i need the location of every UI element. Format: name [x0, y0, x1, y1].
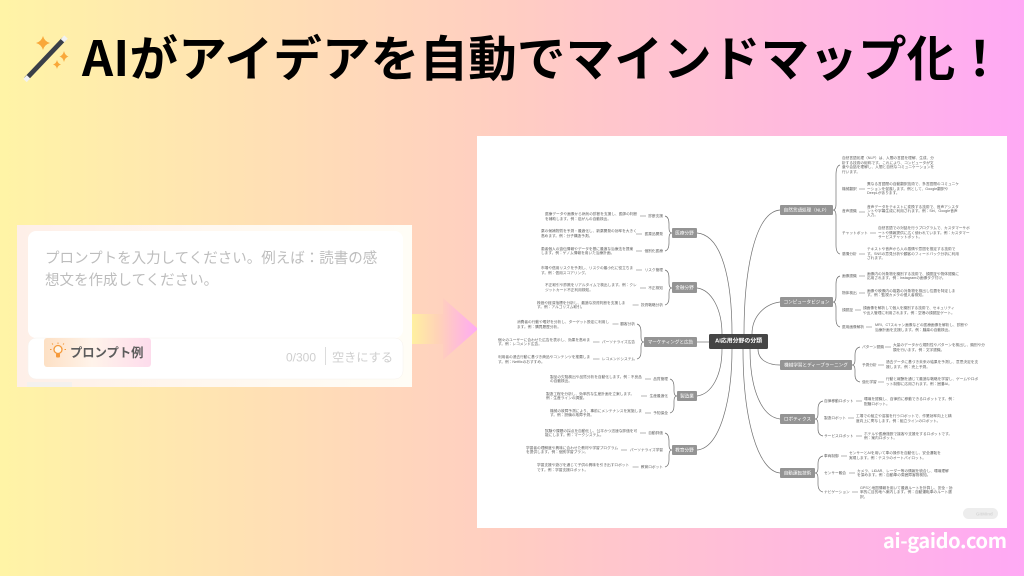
button: prompt examples: プロンプト例 — [70, 343, 143, 361]
branch: robotics: ホテルや医療施設で接客や支援をするロボットです。 — [864, 431, 952, 436]
branch: natural language processing: 異なる言語間の自動翻訳技術で、多言語間のコミュニケ — [867, 181, 959, 186]
branch: machine learning and deep learning: 行動と報酬を通じて最適な戦略を学習し、ゲームやロボ — [886, 376, 978, 381]
branch: marketing: ます。例：購買履歴分析。 — [517, 324, 561, 329]
title: AIがアイデアを自動でマインドマップ化！ — [81, 20, 1004, 90]
branch: medical: 医療データや画像から病気の診断を支援し、医師の判断 — [545, 211, 637, 216]
branch: autonomous driving: ナビゲーション — [824, 489, 850, 494]
branch: computer vision: コンピュータビジョン — [784, 298, 830, 306]
branch: manufacturing: の自動検出。 — [550, 378, 572, 383]
character counter and clear: 空きにする — [332, 350, 393, 364]
branch: computer vision: 物体検出 — [842, 290, 857, 295]
branch: education: 自動評価 — [648, 430, 663, 435]
branch: natural language processing: 感情分析 — [842, 251, 857, 256]
branch: marketing: 利用者の過去行動に基づき商品やコンテンツを推薦しま — [498, 354, 590, 359]
branch: education: 能にします。例：マークシステム。 — [545, 432, 604, 437]
branch: machine learning and deep learning: 予測分析 — [862, 362, 877, 367]
branch: finance: 不正検知 — [648, 285, 663, 290]
branch: manufacturing: 例：生産ラインの調整。 — [546, 395, 587, 400]
branch: natural language processing: テキストや音声から人の感情や意図を推定する技術で — [867, 246, 956, 251]
branch: autonomous driving: 択。 — [860, 494, 867, 499]
branch: marketing — [498, 319, 697, 364]
branch: natural language processing: 自然言語処理（NLP）は、人間の言語を理解、生成、分 — [842, 155, 934, 160]
branch: machine learning and deep learning — [780, 342, 985, 386]
branch: marketing: す。例：レコメンド広告。 — [498, 341, 542, 346]
branch: education: を提供します。例：個別学習プラン。 — [526, 449, 588, 454]
branch: robotics: ロボティクス — [784, 416, 811, 422]
branch: education: 教育分野 — [675, 446, 694, 454]
branch: finance: 株価や経済指標を分析し、最適な投資判断を支援しま — [537, 300, 626, 305]
branch: autonomous driving: 自動運転技術 — [784, 470, 812, 476]
placeholder text — [45, 250, 377, 289]
branch: manufacturing — [546, 374, 697, 417]
branch: natural language processing: す。SNSの意見分析や顧客のフィードバック分析に利用 — [867, 251, 959, 256]
central node — [709, 334, 768, 349]
branch: manufacturing: す。例：設備の故障予測。 — [550, 412, 594, 417]
branch: machine learning and deep learning: 大量のデータから規則性やパターンを検出し、識別や分 — [893, 342, 985, 347]
branch: robotics: 環境を認識し、自律的に移動できるロボットです。例： — [864, 396, 956, 401]
branch: education: です。例：学習支援ロボット。 — [537, 467, 588, 472]
branch: marketing: パーソナライズ広告 — [602, 339, 635, 344]
branch: computer vision: 治療計画を支援します。例：腫瘍の自動検出。 — [875, 327, 952, 332]
branch: robotics: 例：案内ロボット。 — [864, 435, 897, 440]
branch: education: パーソナライズ学習 — [630, 447, 663, 452]
branch: finance: 市場や信用リスクを予測し、リスクの最小化に役立ちま — [541, 265, 633, 270]
arrow — [412, 298, 478, 360]
branch: medical: します。例：ゲノム情報を用いた治療計画。 — [541, 250, 614, 255]
branch: medical: 患者個人の遺伝情報やデータを基に最適な治療法を提案 — [541, 246, 633, 251]
branch: manufacturing: 製造業 — [680, 392, 694, 400]
branch: computer vision: 顔画像を解析して個人を識別する技術で、セキュリティ — [863, 305, 955, 310]
branch: medical: 高めます。例：分子構造予測。 — [541, 233, 592, 238]
branch: natural language processing: 析する技術の総称です。これにより、コンピュータが文 — [842, 160, 934, 165]
branch: autonomous driving: 車両制御 — [824, 453, 839, 458]
branch: computer vision: 画像内の対象物を識別する技術で、顔認証や物体認識に — [867, 271, 959, 276]
branch: natural language processing: 章や会話を理解し、人間と自然なコミュニケーションを — [842, 164, 934, 169]
branch: manufacturing: 製造工程を分析し、効率的な生産計画を立案します。 — [546, 391, 634, 396]
branch: computer vision: MRI、CTスキャン画像などの医療画像を解析し、診断や — [875, 322, 968, 327]
branch: computer vision: 画像や映像内の複数の対象物を検出し位置を特定しま — [867, 288, 956, 293]
branch: manufacturing: 製品の欠陥検出や品質分析を自動化します。例：不良品 — [550, 374, 642, 379]
watermark: GitMind — [976, 512, 993, 516]
branch: robotics: 配膳ロボット。 — [864, 401, 890, 406]
branch: autonomous driving: GPSと地図情報を用いて最適ルートを計算し、安全・効 — [860, 485, 953, 490]
branch: natural language processing: ーションを促進します。例として、Google翻訳や — [867, 186, 949, 191]
branch: medical — [541, 211, 697, 255]
branch: robotics: 製造ロボット — [824, 415, 846, 420]
branch: medical: 医薬品開発 — [645, 231, 663, 236]
branch: machine learning and deep learning: パターン認識 — [862, 344, 884, 349]
branch: manufacturing: 機械の故障予測により、事前にメンテナンスを実施しま — [550, 408, 642, 413]
branch: natural language processing: されます。 — [867, 255, 885, 260]
branch: finance: リスク管理 — [645, 267, 663, 272]
branch: robotics: 度向上に寄与します。例：組立ラインのロボット。 — [856, 418, 940, 423]
branch: education: 試験や課題の採点を自動化し、公平かつ迅速な評価を可 — [545, 428, 637, 433]
branch: autonomous driving: 率的に目的地へ案内します。例：自動運転車のルート選 — [860, 489, 952, 494]
placeholder text: 想文を作成してください。 — [45, 272, 218, 289]
icon: light bulb — [50, 342, 66, 358]
prompt toolbar card — [28, 338, 403, 379]
panel: prompt input screenshot — [17, 225, 412, 387]
branch: natural language processing: ントや字幕生成に利用されます。例：Siri、Google音声 — [867, 208, 958, 213]
branch: medical: 個別化医療 — [645, 248, 663, 253]
placeholder text: プロンプトを入力してください。例えば：読書の感 — [45, 250, 377, 267]
branch: natural language processing: チャットボット — [842, 230, 868, 235]
branch: natural language processing: DeepLがあります。 — [867, 190, 900, 195]
branch: robotics — [780, 396, 956, 440]
branch: natural language processing: 機械翻訳 — [842, 186, 857, 191]
panel: mind map — [477, 136, 1007, 528]
branch: computer vision: す。例：監視カメラの侵入者検知。 — [867, 292, 926, 297]
branch: medical: を補助します。例：癌がんの自動検出。 — [545, 216, 611, 221]
branch: machine learning and deep learning: 強化学習 — [862, 379, 877, 384]
branch: education: 学習者の理解度や興味に合わせた教材や学習プログラム — [526, 445, 618, 450]
branch: natural language processing: 自然言語処理（NLP） — [784, 206, 829, 214]
branch: finance: ジットカード不正利用検知。 — [545, 287, 593, 292]
branch: marketing: す。例：Netflixのおすすめ。 — [498, 359, 545, 364]
branch: finance: す。例：アルゴリズム取引。 — [537, 304, 584, 309]
branch: marketing: 個々のユーザーに合わせた広告を表示し、効果を高めま — [498, 337, 590, 342]
branch: computer vision: 応用されます。例：Instagramの画像タグ付け。 — [867, 275, 946, 280]
branch: medical: 医療分野 — [675, 230, 694, 236]
icon: magic wand — [25, 36, 68, 80]
connectors to central node — [697, 210, 780, 473]
site domain: ai-gaido.com — [883, 525, 1007, 554]
central node: AI応用分野の分類 — [715, 336, 762, 344]
branch: natural language processing: ートや情報提供に広く使われています。例：カスタマー — [878, 230, 970, 235]
branch: robotics: 工場での組立や溶接を行うロボットで、作業効率向上と精 — [856, 413, 952, 418]
branch: machine learning and deep learning: 機械学習とディープラーニング — [784, 362, 848, 368]
branch: manufacturing: 品質管理 — [653, 376, 668, 381]
branch: machine learning and deep learning: 過去データに基づき未来の結果を予測し、意思決定を支 — [886, 359, 978, 364]
branch: finance: 投資戦略分析 — [641, 302, 663, 307]
branch: robotics: 自律移動ロボット — [824, 398, 854, 403]
branch: marketing: 顧客分析 — [620, 321, 635, 326]
branch: computer vision — [780, 271, 968, 332]
branch: natural language processing: 音声データをテキストに変換する技術で、音声アシスタ — [867, 204, 959, 209]
branch: computer vision: 画像認識 — [842, 273, 857, 278]
branch: marketing: マーケティングと広告 — [648, 338, 694, 346]
button: prompt examples — [44, 338, 151, 367]
branch: natural language processing: 音声認識 — [842, 208, 857, 213]
branch: machine learning and deep learning: ット制御に応用されます。例：囲碁AI。 — [886, 381, 952, 386]
branch: medical: 診断支援 — [648, 213, 663, 218]
branch: marketing: 消費者の行動や嗜好を分析し、ターゲット設定に利用し — [517, 319, 609, 324]
branch: education: 教育ロボット — [641, 464, 663, 469]
branch: computer vision: 医用画像解析 — [842, 324, 864, 329]
branch: computer vision: 顔認証 — [842, 307, 853, 312]
branch: education: 学習支援や遊びを通じて子供の興味を引き出すロボット — [537, 462, 629, 467]
branch: autonomous driving: センサー融合 — [824, 470, 846, 475]
branch: machine learning and deep learning: 援します。例：売上予測。 — [886, 364, 930, 369]
branch: marketing: レコメンドシステム — [602, 356, 635, 361]
branch: natural language processing: 入力。 — [867, 212, 878, 217]
branch: natural language processing: 行います。 — [842, 169, 860, 174]
watermark — [963, 508, 998, 519]
branch: robotics: サービスロボット — [824, 433, 854, 438]
branch: machine learning and deep learning: 類を行います。例：文字認識。 — [893, 347, 944, 352]
branch: autonomous driving — [780, 450, 953, 499]
branch: finance — [537, 265, 697, 309]
branch: natural language processing: サービスチャットボット。 — [878, 234, 922, 239]
branch: natural language processing — [780, 155, 970, 260]
branch: finance: す。例：信用スコアリング。 — [541, 270, 588, 275]
branch: manufacturing: 予知保全 — [653, 410, 668, 415]
branch: education — [526, 428, 697, 472]
character counter and clear — [286, 347, 393, 365]
branch: finance: 不正取引や詐欺をリアルタイムで検出します。例：クレ — [545, 282, 637, 287]
branch: autonomous driving: 実現します。例：テスラのオートパイロット。 — [849, 455, 926, 460]
branch: autonomous driving: センサーとAIを用いて車の操作を自動化し、安全運転を — [849, 450, 941, 455]
branch: manufacturing: 生産最適化 — [650, 393, 668, 398]
character counter and clear: 0/300 — [286, 350, 316, 364]
prompt text card — [28, 231, 403, 338]
branch: computer vision: や出入管理に利用されます。例：空港の顔認証ゲート。 — [863, 310, 955, 315]
branch: medical: 薬の候補物質を予測・最適化し、新薬開発の効率を大きく — [541, 228, 637, 233]
branch: natural language processing: 自然言語での対話を行うプログラムで、カスタマーサポ — [878, 225, 970, 230]
branch: autonomous driving: を深めます。例：自動車の周囲障害物検知。 — [857, 472, 930, 477]
branch: autonomous driving: カメラ、LiDAR、レーダー等の情報を統合し、環境理解 — [857, 468, 949, 473]
branch: finance: 金融分野 — [675, 284, 694, 291]
